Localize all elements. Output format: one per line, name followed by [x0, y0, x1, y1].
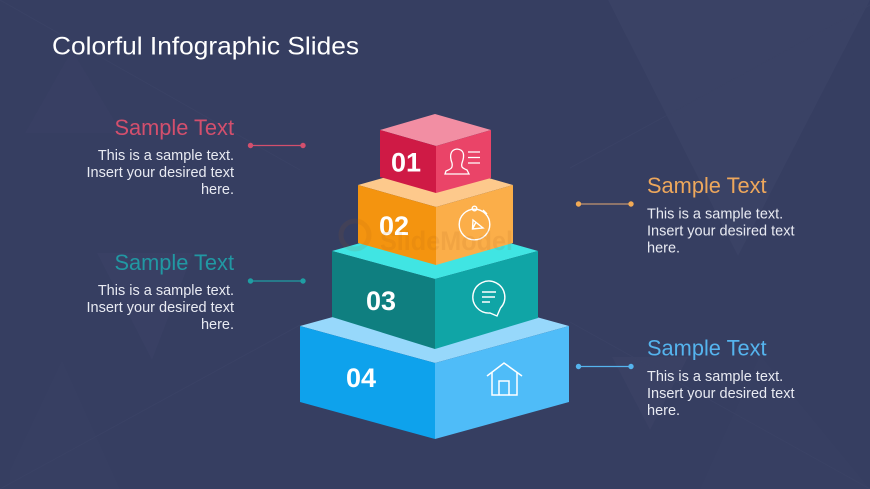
connector: 02 — [576, 201, 634, 207]
callout: 01 text: Insert your desired text — [86, 165, 234, 181]
callout: 02 text — [647, 173, 794, 256]
callout: 02 text: This is a sample text. — [647, 206, 783, 222]
callout: 01 text: Sample Text — [114, 115, 234, 140]
icon: stopwatch — [459, 206, 490, 240]
icon: contact card — [445, 149, 480, 174]
connector: 01 — [248, 143, 306, 148]
callout: 03 text — [86, 250, 234, 333]
icon: speech bubble — [473, 281, 505, 316]
tier 02: orange block — [358, 163, 513, 265]
connector: 03 — [248, 278, 306, 284]
callout: 02 text: Sample Text — [647, 173, 767, 198]
callout: 01 text: This is a sample text. — [98, 148, 234, 164]
callout: 04 text: This is a sample text. — [647, 369, 783, 385]
tier 03: teal block — [332, 222, 538, 349]
callout: 01 text: here. — [201, 182, 234, 198]
callout: 04 text: Insert your desired text — [647, 386, 794, 402]
callout: 03 text: Insert your desired text — [86, 300, 234, 316]
icon: house — [487, 363, 522, 395]
tier 01: red block: 01 — [391, 148, 421, 178]
callout: 02 text: here. — [647, 240, 680, 256]
tier 02: orange block: 02 — [379, 211, 409, 241]
connector: 04 — [576, 364, 634, 369]
callout: 03 text: This is a sample text. — [98, 283, 234, 299]
tier 04: blue block — [300, 289, 569, 439]
callout: 04 text: Sample Text — [647, 336, 767, 360]
watermark — [341, 221, 513, 256]
tier 01: red block — [380, 114, 491, 193]
tier 03: teal block: 03 — [366, 286, 396, 316]
tier 04: blue block: 04 — [346, 363, 376, 393]
callout: 04 text: here. — [647, 403, 680, 419]
callout: 03 text: here. — [201, 317, 234, 333]
callout: 03 text: Sample Text — [114, 250, 234, 275]
callout: 01 text — [86, 115, 234, 198]
watermark: SlideModel — [380, 226, 513, 256]
title: Colorful Infographic Slides — [52, 32, 359, 60]
callout: 02 text: Insert your desired text — [647, 224, 794, 240]
callout: 04 text — [647, 336, 794, 419]
